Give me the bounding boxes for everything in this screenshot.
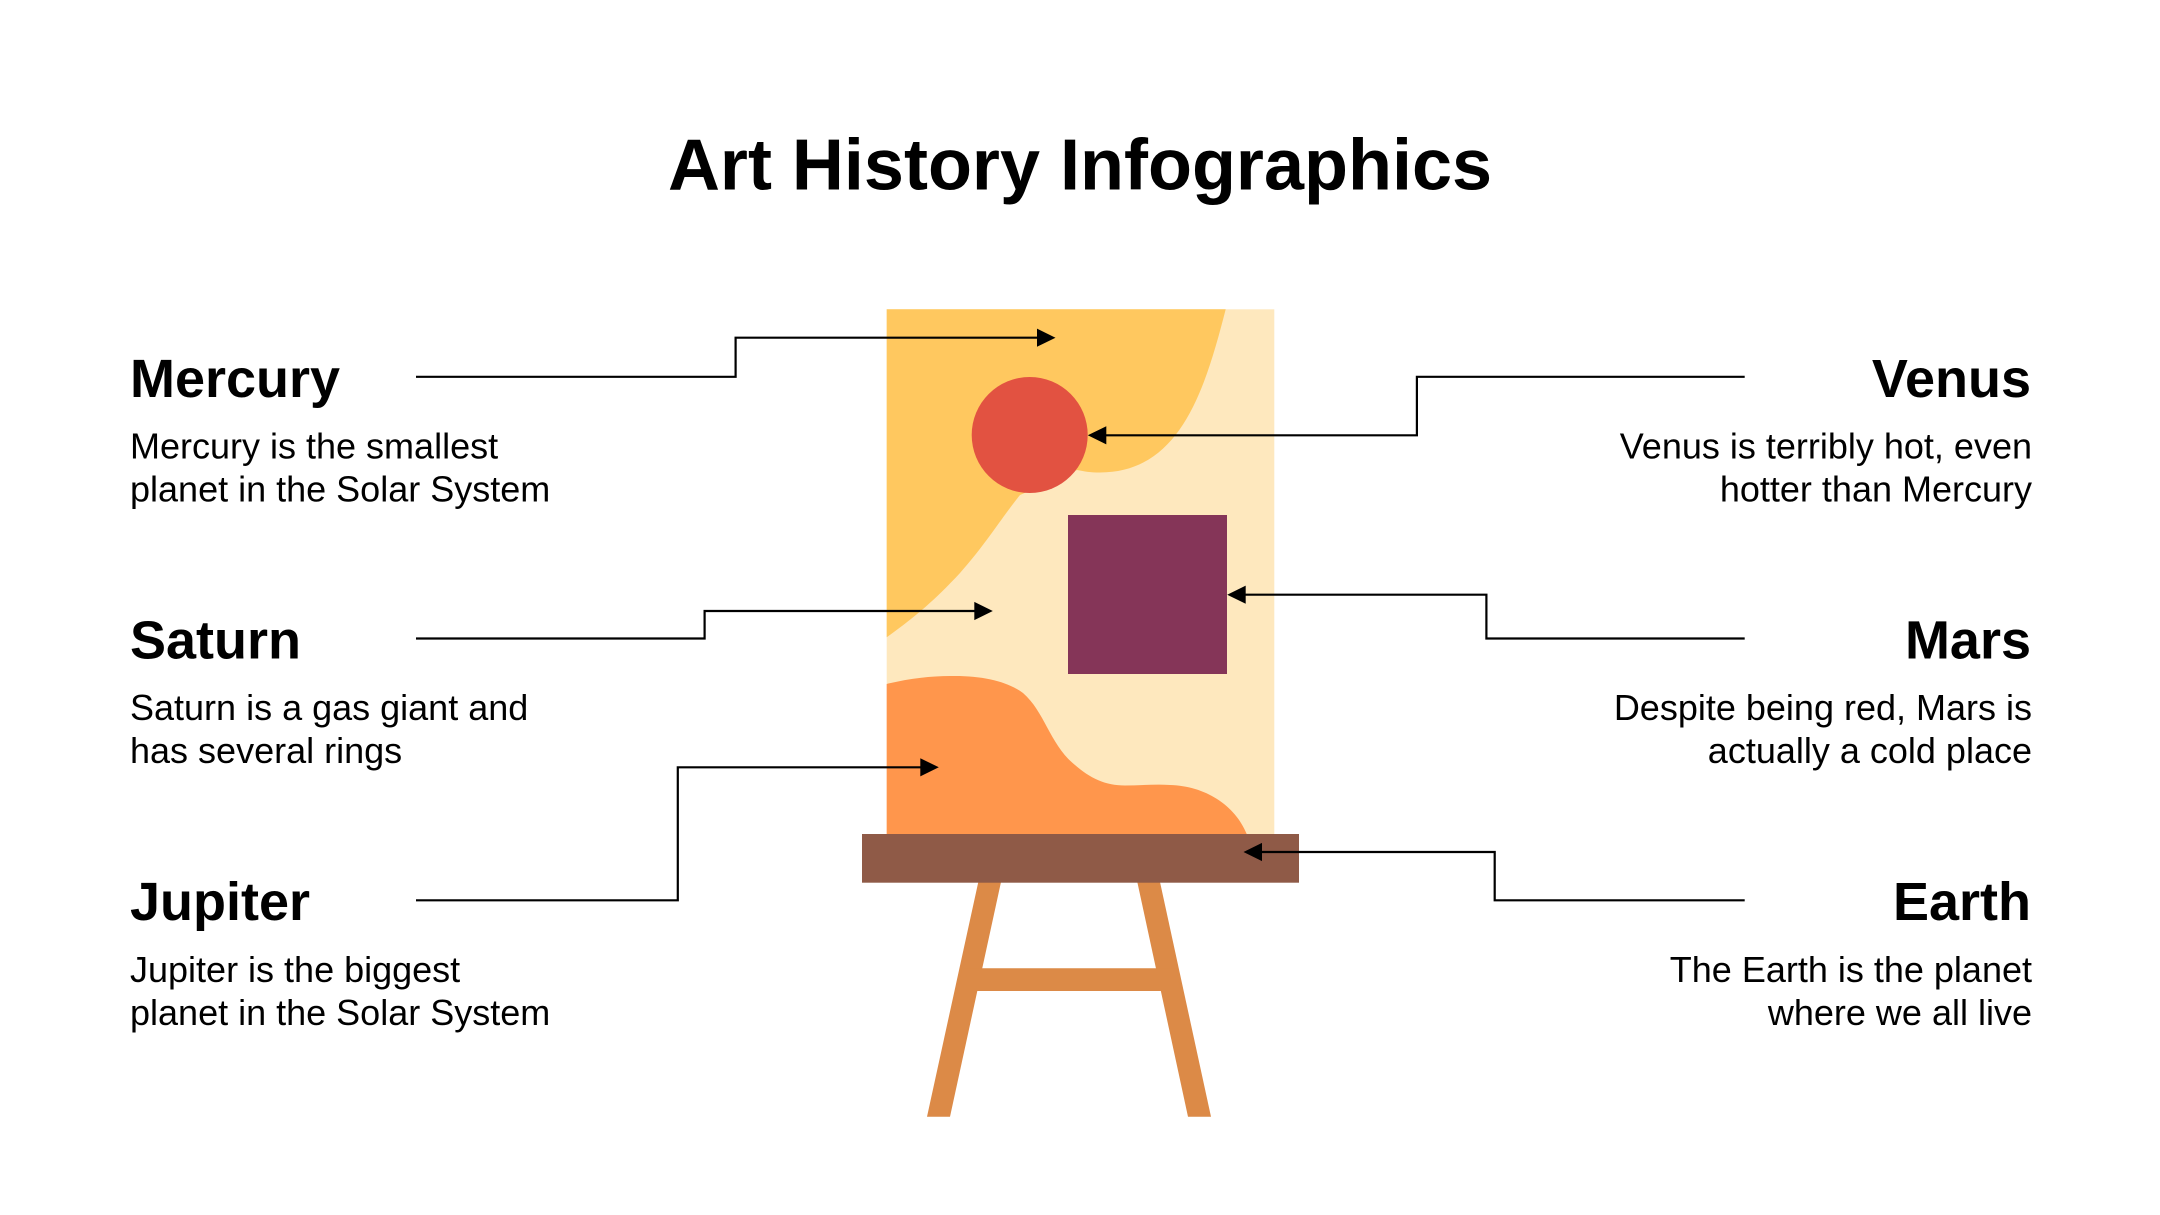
text block: Jupiter: planet in the Solar System <box>130 992 550 1033</box>
text block: Mercury: Mercury <box>130 349 340 409</box>
text block: Jupiter: Jupiter <box>130 872 310 932</box>
canvas background <box>887 309 1274 834</box>
yellow shape <box>887 309 1226 637</box>
text block: Earth: Earth <box>1893 872 2031 932</box>
purple square <box>1068 515 1227 674</box>
text block: Earth <box>1670 872 2032 1033</box>
text block: Saturn: Saturn <box>130 610 301 670</box>
text block: Venus: Venus is terribly hot, even <box>1620 425 2032 466</box>
text block: Mars: actually a cold place <box>1708 730 2032 771</box>
text block: Jupiter <box>130 872 550 1033</box>
text block: Venus: Venus <box>1872 349 2031 409</box>
text block: Venus: hotter than Mercury <box>1720 468 2032 509</box>
text block: Saturn: has several rings <box>130 730 402 771</box>
text block: Saturn <box>130 610 528 771</box>
text block: Venus <box>1620 349 2032 509</box>
text block: Mercury: Mercury is the smallest <box>130 425 498 466</box>
text block: Mars: Despite being red, Mars is <box>1614 687 2032 728</box>
easel legs <box>927 882 1211 1117</box>
orange shape <box>887 676 1247 834</box>
arrow: Venus <box>1088 377 1745 444</box>
arrow: Mars <box>1227 586 1745 638</box>
text block: Mercury <box>130 349 550 509</box>
title: Art History Infographics <box>668 126 1492 206</box>
text block: Earth: The Earth is the planet <box>1670 949 2032 990</box>
text block: Mars: Mars <box>1905 610 2031 670</box>
text block: Saturn: Saturn is a gas giant and <box>130 687 528 728</box>
easel shelf <box>862 834 1299 883</box>
easel illustration <box>862 309 1299 1117</box>
arrow: Jupiter <box>416 758 939 900</box>
text block: Mars <box>1614 610 2032 771</box>
arrow: Earth <box>1244 843 1745 900</box>
arrow: Saturn <box>416 602 993 638</box>
text block: Mercury: planet in the Solar System <box>130 468 550 509</box>
text block: Earth: where we all live <box>1767 992 2032 1033</box>
arrow: Mercury <box>416 329 1056 377</box>
text block: Jupiter: Jupiter is the biggest <box>130 949 460 990</box>
red circle <box>972 377 1088 493</box>
